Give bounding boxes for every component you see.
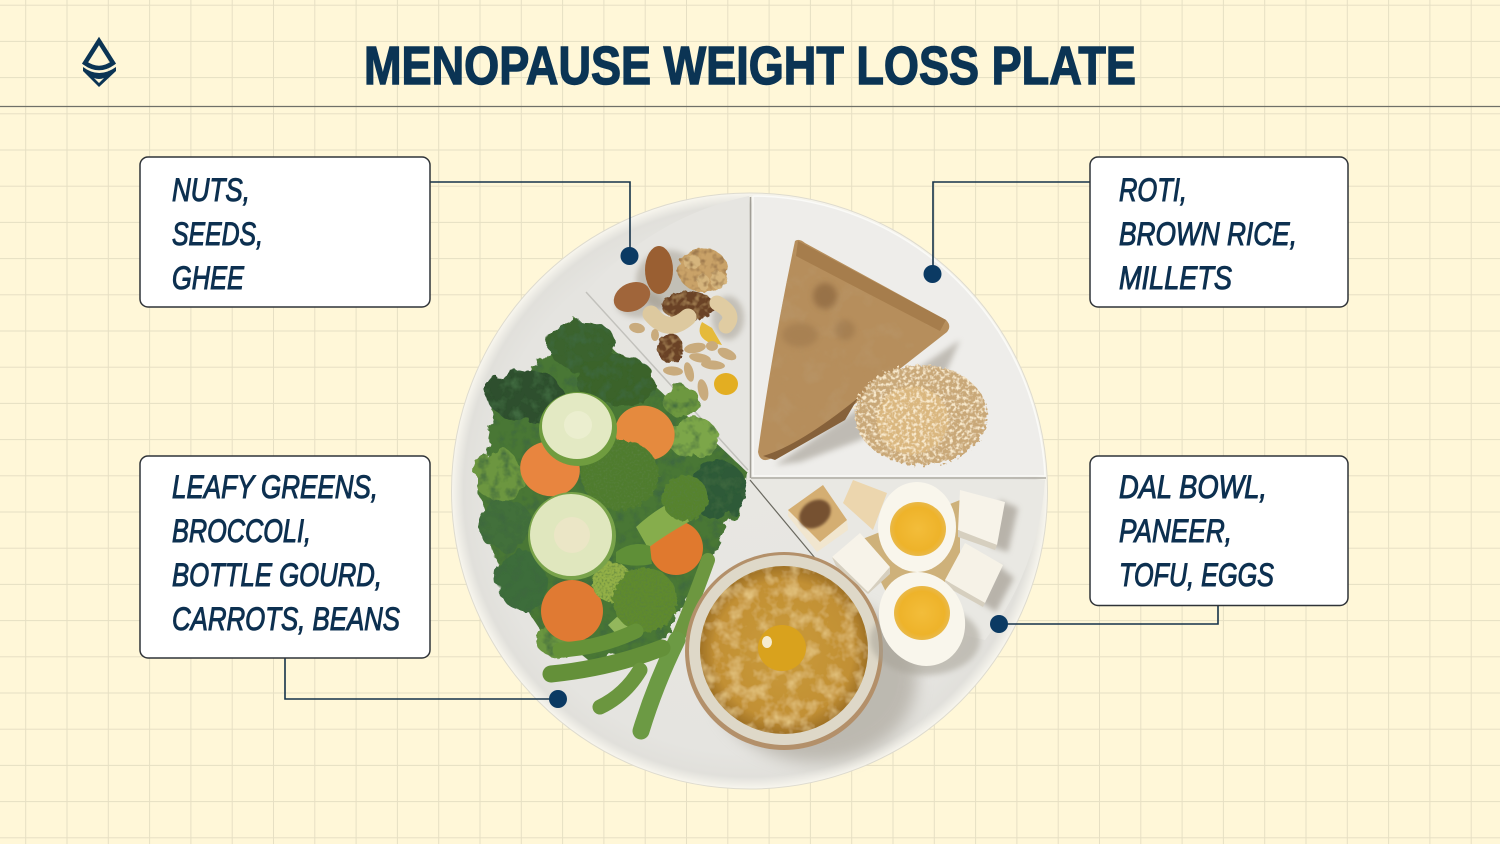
logo icon (83, 41, 116, 87)
label box: vegetables: BOTTLE GOURD, (172, 557, 382, 593)
label box: nuts: GHEE (172, 260, 245, 296)
food: paneer, tofu and eggs (788, 480, 1018, 680)
cashews (651, 314, 688, 325)
title: MENOPAUSE WEIGHT LOSS PLATE (364, 36, 1136, 96)
label box: nuts: SEEDS, (172, 216, 263, 252)
label box: vegetables: CARROTS, BEANS (172, 601, 400, 637)
rice (855, 365, 987, 465)
connector: vegetables (285, 658, 567, 708)
ghee drops (700, 322, 722, 345)
label box: vegetables: BROCCOLI, (172, 513, 311, 549)
label box: nuts (140, 157, 430, 307)
leafy greens (474, 318, 746, 660)
connector: roti (924, 182, 1090, 283)
seeds (628, 321, 738, 402)
label box: grains (1090, 157, 1348, 307)
paneer (788, 480, 887, 552)
egg top (878, 482, 956, 572)
plate section: nuts and seeds (586, 196, 749, 470)
roti (758, 240, 949, 460)
connector: dal (990, 605, 1218, 633)
carrot slices (514, 397, 703, 642)
label box: vegetables (140, 456, 430, 658)
plate section: protein (752, 480, 1045, 640)
cucumber slices (528, 392, 617, 580)
food: nuts, seeds and ghee (609, 246, 744, 402)
label box: grains: BROWN RICE, (1119, 216, 1297, 252)
label box: vegetables: LEAFY GREENS, (172, 469, 378, 505)
food: roti and brown rice (758, 240, 987, 465)
almonds (609, 246, 673, 318)
plate (452, 193, 1048, 789)
label box: proteins: DAL BOWL, (1119, 469, 1267, 505)
green beans (551, 560, 708, 731)
label box: grains: MILLETS (1119, 260, 1232, 296)
plate section: roti and rice (753, 196, 1045, 476)
food: vegetables (474, 318, 746, 731)
label box: proteins: TOFU, EGGS (1119, 557, 1274, 593)
label box: nuts: NUTS, (172, 172, 250, 208)
label box: proteins: PANEER, (1119, 513, 1232, 549)
ghee pool (758, 625, 806, 671)
broccoli (581, 440, 708, 636)
label box: proteins (1090, 456, 1348, 606)
walnut (678, 248, 728, 292)
tofu (832, 490, 1005, 607)
seeds cluster (657, 291, 714, 363)
egg bottom (864, 558, 980, 680)
connector: nuts (430, 182, 638, 265)
label box: grains: ROTI, (1119, 172, 1187, 208)
food: dal bowl (685, 552, 917, 762)
